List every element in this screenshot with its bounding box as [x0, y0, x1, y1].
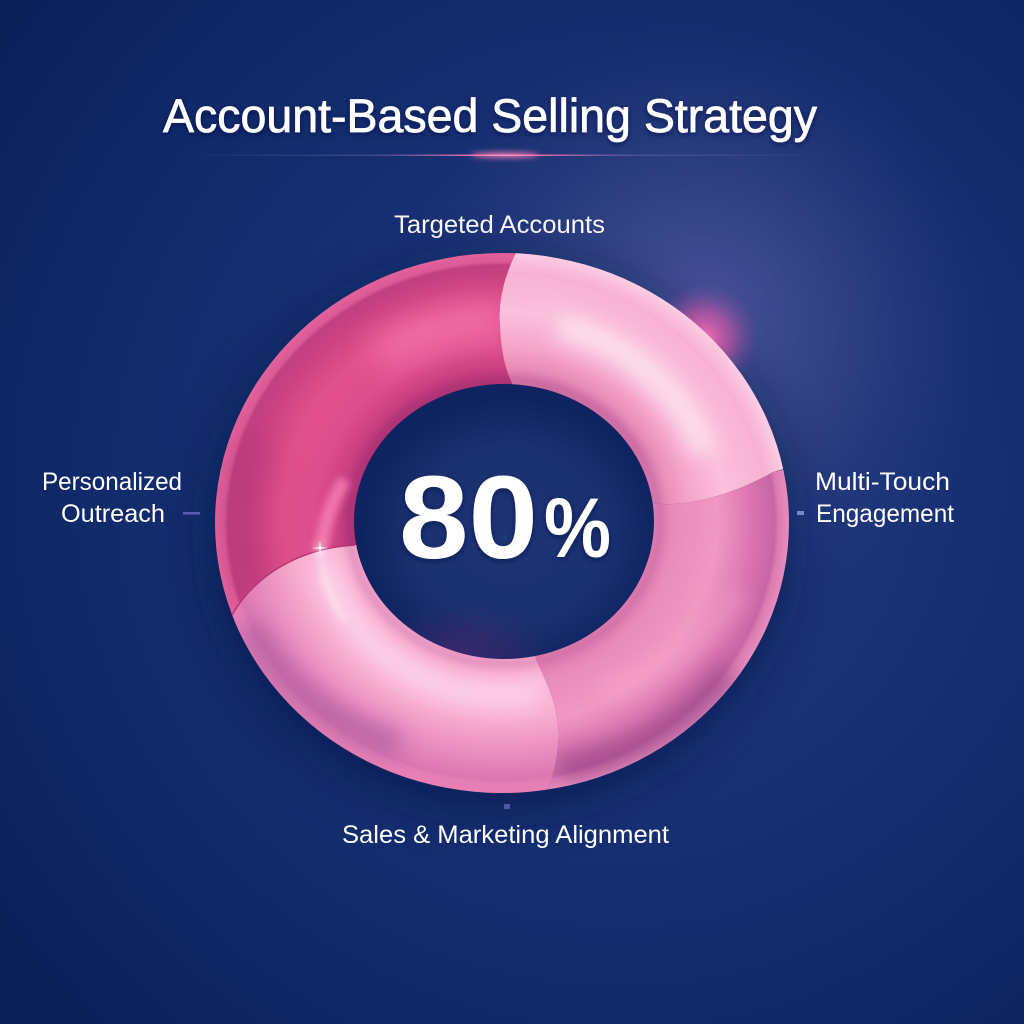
donut chart [215, 253, 789, 793]
background glow [380, 20, 1020, 640]
label: Multi-Touch Engagement: Multi-Touch [815, 468, 950, 496]
connector: left [183, 512, 200, 514]
pink edge glow [650, 284, 758, 392]
segment: multi-touch engagement [535, 470, 789, 790]
connector: bottom [504, 804, 510, 809]
sparkle highlight [312, 541, 328, 555]
center value [399, 452, 611, 584]
label: Multi-Touch Engagement: Engagement [816, 500, 954, 528]
center value: % [544, 481, 611, 575]
label: Personalized Outreach [42, 468, 182, 528]
center hole [352, 382, 656, 662]
title underline [180, 152, 830, 158]
segment: sales and marketing alignment [232, 545, 558, 793]
segment: targeted accounts [500, 253, 784, 504]
label: Targeted Accounts: Targeted Accounts [394, 211, 605, 239]
label: Multi-Touch Engagement [815, 468, 954, 528]
label: Personalized Outreach: Personalized [42, 468, 182, 496]
segment: personalized outreach [200, 240, 540, 640]
connector: right [797, 511, 804, 515]
label: Personalized Outreach: Outreach [61, 500, 165, 528]
center value: 80 [399, 452, 538, 584]
label: Sales & Marketing Alignment: Sales & Marketing Alignment [342, 821, 669, 849]
ring segments [215, 253, 789, 793]
inner shadow of top edge [348, 378, 660, 664]
title: Account-Based Selling Strategy [163, 89, 817, 142]
donut shadow [208, 259, 792, 811]
